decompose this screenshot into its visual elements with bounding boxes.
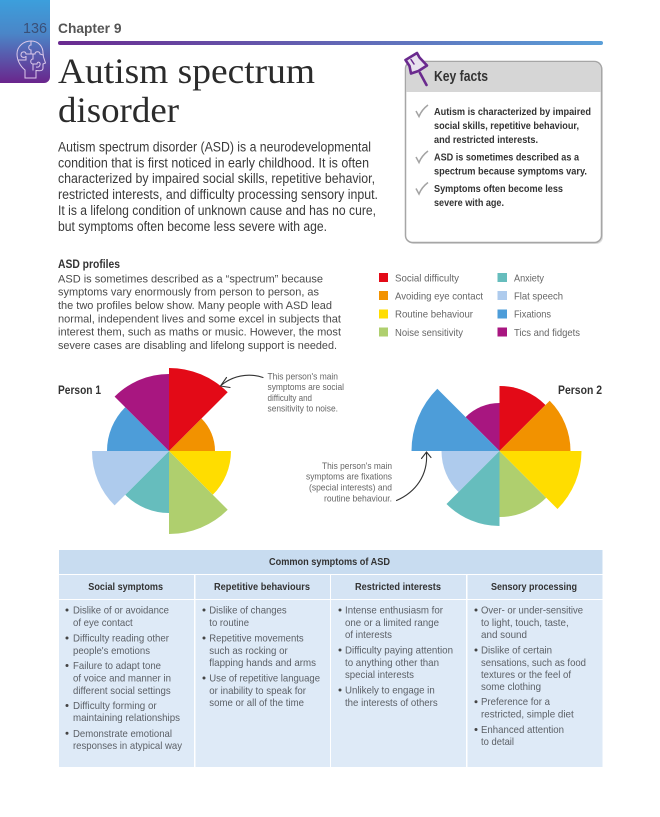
arrow: person 2 callout — [396, 452, 431, 500]
icon: puzzle head — [17, 41, 46, 78]
fact 1: and restricted interests. — [434, 135, 538, 146]
chapter rule — [58, 41, 603, 45]
label: person 1: Person 1 — [58, 383, 101, 397]
fact 3: Symptoms often become less — [434, 184, 563, 195]
callout: person 1: sensitivity to noise. — [268, 404, 338, 414]
column: sensory processing: restricted, simple diet — [481, 710, 574, 720]
intro text block: restricted interests, and difficulty processing sensory input. — [58, 187, 378, 202]
fact 3: severe with age. — [434, 198, 504, 209]
chart: person 2 rose — [412, 386, 582, 526]
column: sensory processing: sensations, such as food — [481, 658, 586, 669]
key facts heading: Key facts — [434, 69, 488, 85]
intro text block: characterized by impaired social skills, repetitive behavior, — [58, 171, 375, 186]
fact 3 — [416, 182, 563, 209]
callout: person 2: routine behaviour. — [324, 493, 392, 503]
intro text block: It is a lifelong condition of unknown cause and has no cure, — [58, 203, 376, 218]
column: social symptoms: Demonstrate emotional — [73, 729, 172, 740]
column: restricted interests — [331, 575, 466, 767]
column: restricted interests: special interests — [345, 670, 414, 681]
column: sensory processing — [468, 575, 602, 767]
column: repetitive behaviours: flapping hands and arms — [209, 658, 316, 669]
callout: person 1: symptoms are social — [268, 382, 344, 392]
column: social symptoms: Failure to adapt tone — [73, 661, 161, 672]
column: repetitive behaviours: such as rocking or — [209, 646, 288, 657]
ASD profiles text block — [58, 259, 342, 352]
profiles heading: ASD profiles — [58, 259, 120, 271]
column: restricted interests: Difficulty paying attention — [345, 646, 453, 656]
title: Autism spectrum — [58, 51, 315, 91]
column: social symptoms: Difficulty forming or — [73, 701, 157, 712]
callout: person 2: This person's main — [322, 461, 392, 471]
fact 2 — [416, 151, 587, 178]
column: social symptoms: Dislike of or avoidance — [73, 606, 169, 616]
ASD profiles text block: symptoms vary enormously from person to person, as — [58, 287, 319, 299]
legend: Avoiding eye contact — [395, 291, 483, 302]
chapter heading: Chapter 9 — [58, 20, 122, 36]
legend: Noise sensitivity — [395, 328, 464, 339]
column: repetitive behaviours: some or all of the time — [209, 698, 304, 709]
title — [58, 51, 315, 130]
column: social symptoms: of voice and manner in — [73, 674, 171, 684]
column: repetitive behaviours: Repetitive movements — [209, 634, 304, 644]
legend: Routine behaviour — [395, 310, 474, 320]
column: restricted interests: Intense enthusiasm for — [345, 606, 444, 616]
intro text block: but symptoms often become less severe with age. — [58, 219, 327, 234]
fact 1: social skills, repetitive behaviour, — [434, 121, 579, 132]
column: social symptoms: of eye contact — [73, 618, 133, 629]
fact 1 — [416, 105, 591, 146]
column: restricted interests: Unlikely to engage in — [345, 686, 435, 696]
callout: person 2: (special interests) and — [309, 482, 392, 492]
column: restricted interests: one or a limited range — [345, 618, 439, 629]
ASD profiles text block: interest them, such as maths or music. However, the most — [58, 327, 342, 339]
column: social symptoms: Social symptoms — [88, 582, 163, 593]
column: social symptoms: Difficulty reading other — [73, 634, 170, 644]
column: repetitive behaviours: Use of repetitive language — [209, 674, 320, 684]
legend: Anxiety — [514, 273, 545, 284]
column: repetitive behaviours: Repetitive behaviours — [214, 582, 310, 593]
column: repetitive behaviours: to routine — [209, 618, 249, 629]
icon: push pin — [406, 53, 427, 85]
ASD profiles text block: ASD is sometimes described as a “spectrum” because — [58, 273, 323, 285]
table title row: Common symptoms of ASD — [269, 557, 390, 568]
legend: Flat speech — [514, 291, 563, 302]
column: restricted interests: to anything other than — [345, 658, 439, 669]
intro text block: condition that is first noticed in early childhood. It is often — [58, 155, 369, 170]
ASD profiles text block: severe cases are disabling and lifelong support is needed. — [58, 340, 337, 352]
callout: person 1 — [268, 371, 344, 414]
ASD profiles text block: the two profiles below show. Many people with ASD lead — [58, 300, 332, 312]
column: sensory processing: Preference for a — [481, 697, 550, 708]
column: restricted interests: the interests of others — [345, 698, 438, 709]
legend — [379, 273, 580, 339]
chapter tab with page number and head icon — [0, 0, 50, 83]
column: sensory processing: and sound — [481, 630, 527, 641]
column: sensory processing: Dislike of certain — [481, 646, 552, 656]
column: repetitive behaviours: Dislike of changes — [209, 606, 287, 616]
legend: Social difficulty — [395, 273, 460, 284]
column: social symptoms: maintaining relationships — [73, 713, 180, 724]
column: social symptoms — [59, 575, 194, 767]
legend: Tics and fidgets — [514, 328, 580, 339]
fact 2: ASD is sometimes described as a — [434, 153, 579, 164]
intro text block — [58, 140, 378, 234]
chart: person 1 rose — [92, 368, 231, 534]
callout: person 2: symptoms are fixations — [306, 472, 392, 482]
legend: Fixations — [514, 310, 551, 320]
column: social symptoms: people's emotions — [73, 646, 150, 657]
column: sensory processing: to detail — [481, 737, 514, 748]
column: restricted interests: Restricted interests — [355, 582, 441, 593]
column: sensory processing: Sensory processing — [491, 582, 577, 593]
column: restricted interests: of interests — [345, 630, 392, 641]
column: sensory processing: Enhanced attention — [481, 725, 564, 736]
column: social symptoms: different social settings — [73, 686, 171, 697]
intro text block: Autism spectrum disorder (ASD) is a neurodevelopmental — [58, 140, 371, 154]
column: sensory processing: textures or the feel of — [481, 670, 571, 681]
callout: person 1: difficulty and — [268, 393, 312, 403]
callout: person 1: This person's main — [268, 371, 338, 381]
column: social symptoms: responses in atypical way — [73, 741, 183, 752]
table title row — [59, 550, 602, 574]
column: sensory processing: to light, touch, taste, — [481, 618, 569, 629]
fact 1: Autism is characterized by impaired — [434, 107, 591, 118]
panel: key facts — [406, 53, 603, 244]
column: sensory processing: some clothing — [481, 682, 541, 693]
title: disorder — [58, 90, 179, 130]
fact 2: spectrum because symptoms vary. — [434, 167, 587, 178]
arrow: person 1 callout — [220, 375, 263, 388]
column: repetitive behaviours — [196, 575, 330, 767]
table: common symptoms of ASD — [59, 550, 602, 767]
label: person 2: Person 2 — [558, 383, 602, 397]
callout: person 2 — [306, 461, 392, 503]
column: sensory processing: Over- or under-sensitive — [481, 606, 583, 616]
column: repetitive behaviours: or inability to speak for — [209, 686, 307, 697]
page number: 136 — [23, 21, 47, 37]
ASD profiles text block: normal, independent lives and some excel in subjects that — [58, 313, 342, 325]
